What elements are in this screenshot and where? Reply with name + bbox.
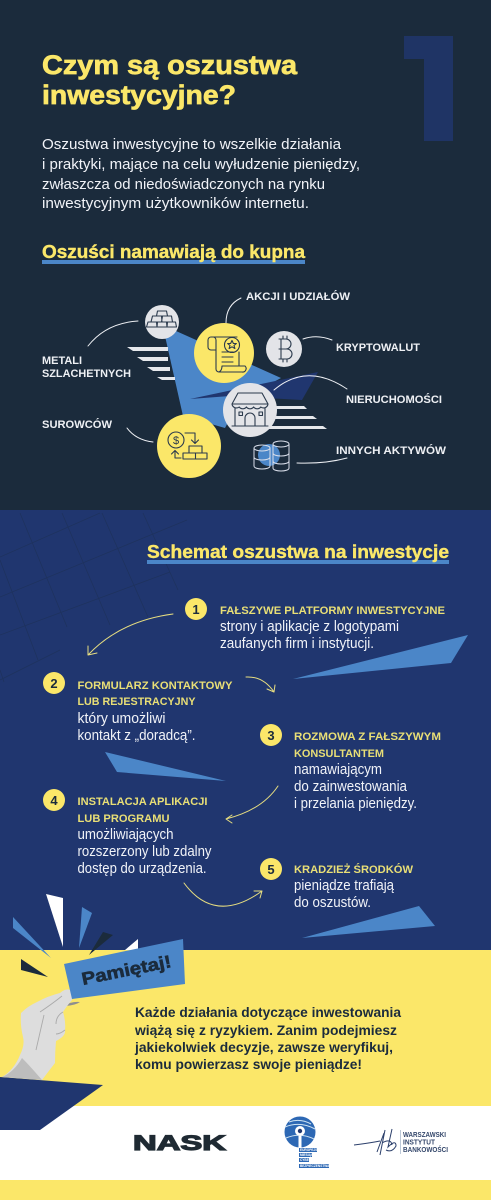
arrow: step 3 to 4 (226, 786, 278, 823)
callout card: Pamiętaj! (64, 939, 185, 999)
arrow: step 2 to 3 (246, 677, 275, 692)
dark blue backdrop shape (190, 372, 318, 400)
label: metali szlachetnych: SZLACHETNYCH (42, 368, 131, 380)
intro text: inwestycyjnym użytkowników internetu. (42, 196, 309, 212)
arrow: step 4 to 5 (184, 883, 262, 906)
label: nieruchomości: NIERUCHOMOŚCI (346, 393, 442, 406)
reminder text: wiążą się z ryzykiem. Zanim podejmiesz (134, 1023, 397, 1038)
icon: stock document (194, 323, 254, 383)
decorative blue wedge 3 (302, 906, 435, 938)
step 2 (43, 672, 233, 744)
intro text (42, 137, 360, 212)
logo: Warszawski Instytut Bankowości: INSTYTUT (403, 1138, 435, 1146)
step 1 (185, 598, 445, 652)
connector lines (88, 298, 347, 463)
arrow: step 1 to 2 (88, 614, 173, 655)
step 3: namawiającym (294, 762, 382, 778)
step 2: FORMULARZ KONTAKTOWY (78, 680, 233, 692)
step 1: FAŁSZYWE PLATFORMY INWESTYCYJNE (220, 605, 445, 617)
step 3: ROZMOWA Z FAŁSZYWYM (294, 731, 441, 743)
reminder text: Każde działania dotyczące inwestowania (135, 1005, 401, 1020)
step 3 (260, 724, 441, 812)
big number 1 (404, 36, 453, 141)
panel: reminder background (0, 950, 491, 1106)
icon: stacks of assets (254, 441, 289, 471)
step 5: pieniądze trafiają (294, 878, 395, 894)
step 3: do zainwestowania (294, 779, 408, 795)
logo: Europejski Miesiąc Cyberbezpieczeństwa: EUROPEJSKI (300, 1148, 321, 1152)
step 4: umożliwiających (78, 827, 174, 843)
step 5: 5 (267, 862, 275, 877)
step 4: dostęp do urządzenia. (78, 861, 206, 877)
intro text: zwłaszcza od niedoświadczonych na rynku (42, 177, 325, 193)
step 5: do oszustów. (294, 895, 371, 911)
title: Czym są oszustwa (42, 50, 298, 80)
intro text: i praktyki, mające na celu wyłudzenie pieniędzy, (42, 157, 360, 173)
step 3: 3 (267, 728, 275, 743)
step 3: KONSULTANTEM (294, 748, 384, 760)
icon: bitcoin (266, 331, 302, 367)
label: innych aktywów: INNYCH AKTYWÓW (336, 444, 447, 457)
label: metali szlachetnych (42, 355, 131, 380)
step 2: LUB REJESTRACYJNY (78, 696, 196, 708)
panel: footer white (0, 1106, 491, 1180)
icon: gold bars (145, 305, 179, 339)
title (42, 50, 298, 110)
icon: storefront (223, 383, 277, 437)
logo: Europejski Miesiąc Cyberbezpieczeństwa: BEZPIECZEŃSTWA (300, 1163, 330, 1168)
logo: Europejski Miesiąc Cyberbezpieczeństwa: MIESIĄC (300, 1153, 314, 1157)
diagram: asset types (42, 290, 447, 478)
step 4: 4 (50, 793, 58, 808)
label: surowców: SUROWCÓW (42, 418, 113, 431)
right stripes (268, 406, 327, 429)
panel: scheme background (0, 510, 491, 950)
reminder text: jakiekolwiek decyzje, zawsze weryfikuj, (134, 1040, 393, 1055)
logo: Europejski Miesiąc Cyberbezpieczeństwa: CYBER (300, 1158, 312, 1162)
icon: commodities exchange (157, 414, 221, 478)
logo: Europejski Miesiąc Cyberbezpieczeństwa (284, 1116, 330, 1168)
step 2: 2 (50, 676, 58, 691)
footer yellow strip (0, 1180, 491, 1200)
label: kryptowalut: KRYPTOWALUT (336, 342, 420, 354)
burst of shards (13, 894, 138, 977)
logo: Warszawski Instytut Bankowości: WARSZAWSKI (403, 1130, 446, 1139)
icon: commodities exchange: $ (173, 435, 179, 447)
logo: Warszawski Instytut Bankowości (354, 1129, 448, 1155)
blue backdrop shape (165, 331, 281, 428)
heading: Schemat oszustwa na inwestycje: Schemat oszustwa na inwestycje (147, 542, 449, 562)
step 2: kontakt z „doradcą”. (78, 728, 196, 744)
panel: intro background (0, 0, 491, 510)
step 5 (260, 858, 414, 911)
step 4: LUB PROGRAMU (78, 813, 170, 825)
decorative blue wedge 2 (105, 752, 226, 781)
step 4: rozszerzony lub zdalny (78, 844, 212, 860)
logo: Warszawski Instytut Bankowości: BANKOWOŚCI (403, 1145, 448, 1154)
label: akcji i udziałów: AKCJI I UDZIAŁÓW (246, 290, 351, 303)
step 1: strony i aplikacje z logotypami (220, 619, 399, 635)
step 2: który umożliwi (78, 711, 166, 727)
step 1: 1 (192, 602, 200, 617)
icon: hand holding card (2, 989, 80, 1080)
logo: NASK: NASK (133, 1132, 226, 1155)
title: inwestycyjne? (42, 80, 236, 110)
step 4 (43, 789, 212, 877)
left stripes (127, 347, 175, 380)
decorative blue wedge 1 (293, 635, 468, 679)
callout card: Pamiętaj!: Pamiętaj! (80, 951, 173, 989)
reminder text (134, 1005, 401, 1072)
label: metali szlachetnych: METALI (42, 355, 82, 367)
heading: Oszuści namawiają do kupna: Oszuści namawiają do kupna (42, 242, 306, 262)
bottom-left dark blue shape (0, 1077, 103, 1130)
step 3: i przelania pieniędzy. (294, 796, 417, 812)
step 5: KRADZIEŻ ŚRODKÓW (294, 863, 414, 876)
step 1: zaufanych firm i instytucji. (220, 636, 374, 652)
background grid (0, 513, 187, 682)
step 4: INSTALACJA APLIKACJI (78, 796, 208, 808)
reminder text: komu powierzasz swoje pieniądze! (135, 1057, 362, 1072)
intro text: Oszustwa inwestycyjne to wszelkie działania (42, 137, 342, 153)
